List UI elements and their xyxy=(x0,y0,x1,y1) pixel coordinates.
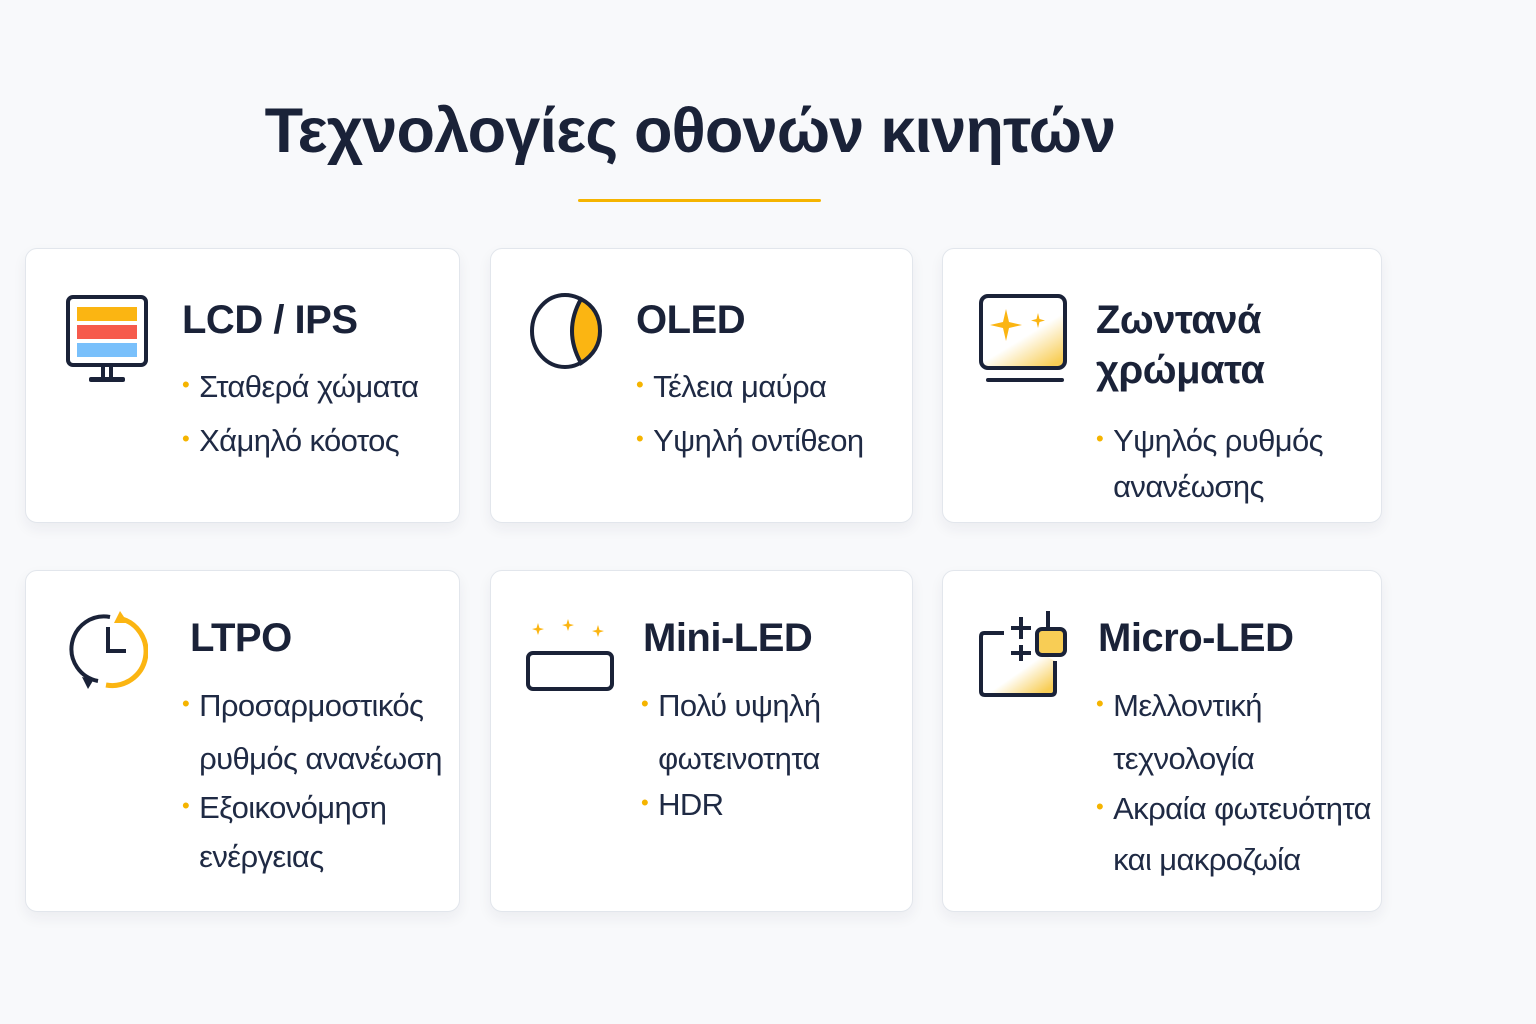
icon: half moon xyxy=(530,293,602,369)
panel: Mini-LED xyxy=(490,570,913,912)
icon: clock refresh xyxy=(69,611,148,689)
panel: Vivid colors xyxy=(942,248,1382,523)
icon: screen with sparkles xyxy=(979,294,1067,382)
bullets: • Πολύ υψηλή xyxy=(641,688,821,723)
panel: OLED xyxy=(490,248,913,523)
heading xyxy=(1096,298,1264,392)
icon: micro pixels xyxy=(979,611,1067,697)
panel: OLED: • Υψηλή οντίθεοη xyxy=(636,423,864,458)
heading: LCD / IPS xyxy=(182,298,358,342)
panel: LCD / IPS: • Χάμηλό κόοτος xyxy=(182,423,399,458)
heading: Micro-LED xyxy=(1098,616,1294,660)
bullets: • Σταθερά χώματα xyxy=(182,369,419,404)
panel: Micro-LED: • Ακραία φωτευότητα xyxy=(1096,791,1371,826)
panel: LCD / IPS xyxy=(25,248,460,523)
panel: Micro-LED xyxy=(942,570,1382,912)
icon: monitor xyxy=(66,295,148,382)
bullets: • Υψηλός ρυθμός xyxy=(1096,423,1323,458)
bullets xyxy=(182,688,440,776)
bullets: • Προσαρμοστικός xyxy=(182,688,423,723)
heading: Mini-LED xyxy=(643,616,812,660)
bullets: • Μελλοντική xyxy=(1096,688,1262,723)
heading: OLED xyxy=(636,298,745,342)
bullets xyxy=(1096,423,1323,504)
panel: Mini-LED: • HDR xyxy=(641,787,723,822)
title: Τεχνολογίες οθονών κινητών xyxy=(265,96,1115,166)
bullets xyxy=(641,688,821,776)
icon: light bar xyxy=(526,619,614,691)
heading: χρώματα xyxy=(1096,348,1264,392)
panel: LTPO: • Εξοικονόμηση xyxy=(182,790,386,825)
title underline xyxy=(578,199,821,202)
panel: LTPO xyxy=(25,570,460,912)
bullets xyxy=(1096,688,1262,776)
bullets: • Τέλεια μαύρα xyxy=(636,369,826,404)
heading: LTPO xyxy=(190,616,292,660)
heading: Ζωντανά xyxy=(1096,298,1261,342)
